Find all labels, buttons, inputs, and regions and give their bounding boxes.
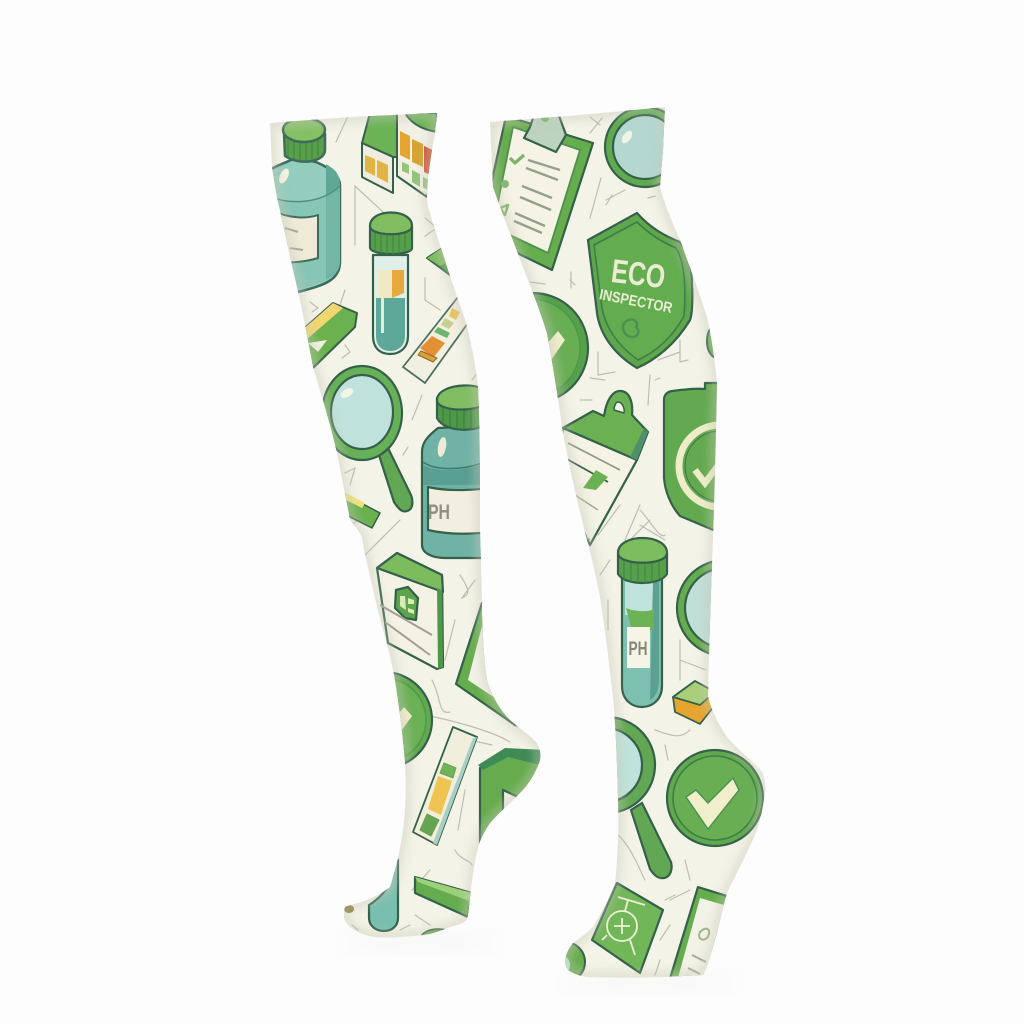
magnifier side [676,560,712,654]
box card with emblem [377,553,443,669]
floor shadow [340,937,740,987]
shield eco inspector [588,213,692,368]
left sock [270,113,540,938]
pH chart cards [362,113,437,197]
magnifier 1 [322,366,412,511]
small box yellow green [300,303,357,368]
small orange box [673,681,715,724]
badge with check [662,382,717,532]
toe small circles [344,905,445,936]
magnifier top [604,108,665,188]
teal tube at toe [369,860,398,931]
bottle 1 [272,120,342,294]
shield leaf emblem [623,319,638,337]
toe circle [545,942,585,982]
right sock [490,107,766,978]
green bar [415,877,472,917]
illustration: pair of eco inspector socks [270,107,766,978]
check circle left [393,672,434,764]
test tube 1 [370,212,412,354]
eco label: ECO [609,252,667,295]
vertical test strip [413,727,477,845]
small yellow green box [340,492,380,528]
check circle large mid [532,292,590,398]
green block [426,248,450,276]
small edge green shape [706,328,714,358]
background scribbles left [310,112,510,930]
clipboard checklist [492,116,594,272]
green frame [454,602,518,727]
left sock edge shading [270,113,540,937]
background scribbles right [530,117,706,975]
magnifier lower [614,716,673,880]
test strip diagonal [403,297,468,383]
inspector label: INSPECTOR [598,286,674,317]
check circle heel [667,750,763,846]
green card with symbol [592,883,663,973]
test tube pH: PH [628,639,648,660]
heel shield [478,748,540,845]
frame document [669,886,726,977]
right sock edge shading [490,107,765,978]
bottle 2 pH: PH [428,501,450,524]
clipboard lower [555,391,648,545]
test tube pH [618,538,667,707]
bottle 2 pH [420,384,481,560]
